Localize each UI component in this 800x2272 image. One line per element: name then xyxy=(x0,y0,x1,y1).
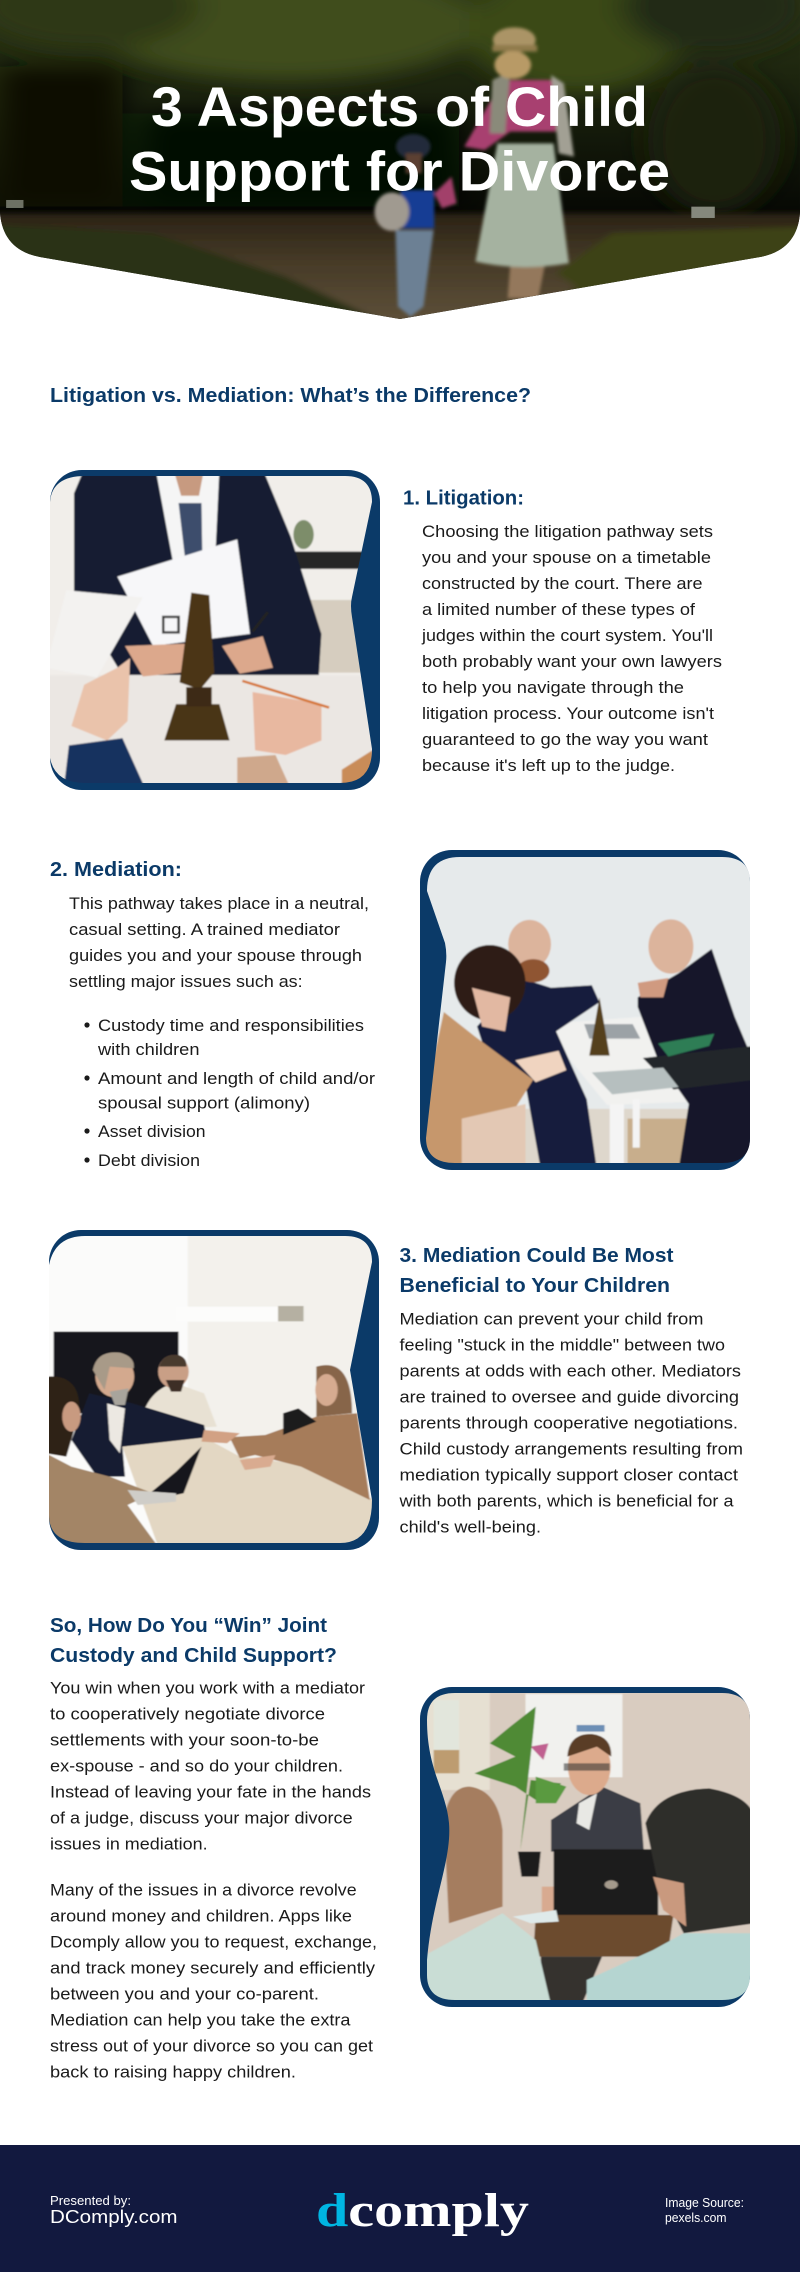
text block: 1. litigation: litigation process. Your outcome isn't xyxy=(422,705,714,723)
text block: 1. litigation: 1. Litigation: xyxy=(403,486,524,510)
text block: how to win joint custody xyxy=(50,1614,377,2082)
footer: presented by xyxy=(50,2194,178,2227)
bullet list: issues settled in mediation xyxy=(84,1017,376,1170)
footer band xyxy=(0,2145,800,2272)
panel: handshake photo card xyxy=(46,1230,379,1550)
text block: 1. litigation: guaranteed to go the way you want xyxy=(422,731,708,749)
text block: how to win joint custody: ex-spouse - and so do your children. xyxy=(50,1758,343,1776)
text block: 1. litigation: a limited number of these types of xyxy=(422,601,695,619)
text block: how to win joint custody: Dcomply allow you to request, exchange, xyxy=(50,1934,377,1952)
text block: how to win joint custody: So, How Do You “Win” Joint xyxy=(50,1614,327,1637)
footer: presented by: Presented by: xyxy=(50,2194,131,2208)
text block: 3. mediation beneficial to children: Child custody arrangements resulting from xyxy=(400,1440,743,1458)
bullet list: issues settled in mediation: Amount and length of child and/or xyxy=(98,1070,376,1088)
text block: 1. litigation: Choosing the litigation pathway sets xyxy=(422,523,713,541)
text block: how to win joint custody: between you and your co-parent. xyxy=(50,1986,319,2004)
text block: 3. mediation beneficial to children: parents at odds with each other. Mediators xyxy=(400,1362,741,1380)
text block: 1. litigation: you and your spouse on a timetable xyxy=(422,549,711,567)
text block: how to win joint custody: to cooperatively negotiate divorce xyxy=(50,1706,325,1724)
text block: 2. mediation: guides you and your spouse through xyxy=(69,947,362,965)
text block: how to win joint custody: of a judge, discuss your major divorce xyxy=(50,1810,353,1828)
text block: 1. litigation: judges within the court system. You'll xyxy=(421,627,713,645)
text block: 3. mediation beneficial to children: feeling "stuck in the middle" between two xyxy=(400,1336,725,1354)
text block: 3. mediation beneficial to children: child's well-being. xyxy=(400,1518,541,1536)
text block: how to win joint custody: Instead of leaving your fate in the hands xyxy=(50,1784,371,1802)
text block: 2. mediation: casual setting. A trained mediator xyxy=(69,921,341,939)
text block: 3. mediation beneficial to children: 3. Mediation Could Be Most xyxy=(400,1244,674,1267)
text block: how to win joint custody: issues in mediation. xyxy=(50,1836,208,1854)
text block: 3. mediation beneficial to children: with both parents, which is beneficial for a xyxy=(398,1492,734,1510)
bullet list: issues settled in mediation: with children xyxy=(97,1041,200,1059)
text block: 1. litigation: both probably want your own lawyers xyxy=(422,653,722,671)
text block: 3. mediation beneficial to children: Mediation can prevent your child from xyxy=(400,1310,704,1328)
section heading: litigation vs mediation: Litigation vs. Mediation: What’s the Difference? xyxy=(50,384,531,407)
text block: 3. mediation beneficial to children: mediation typically support closer contact xyxy=(400,1466,738,1484)
title: 3 Aspects of Child xyxy=(151,75,648,138)
bullet list: issues settled in mediation: Asset division xyxy=(98,1123,206,1141)
title xyxy=(129,75,670,202)
text block: how to win joint custody: back to raising happy children. xyxy=(50,2064,296,2082)
text block: how to win joint custody: settlements with your soon-to-be xyxy=(50,1732,319,1750)
text block: 1. litigation xyxy=(403,486,722,775)
text block: 2. mediation xyxy=(50,858,376,1170)
text block: 2. mediation: This pathway takes place in a neutral, xyxy=(69,895,369,913)
bullet list: issues settled in mediation: Custody time and responsibilities xyxy=(98,1017,364,1035)
text block: how to win joint custody: around money and children. Apps like xyxy=(50,1908,352,1926)
text block: how to win joint custody: Mediation can help you take the extra xyxy=(50,2012,351,2030)
bullet list: issues settled in mediation: spousal support (alimony) xyxy=(98,1094,310,1112)
text block: 2. mediation: settling major issues such as: xyxy=(69,973,303,991)
text block: how to win joint custody: Many of the issues in a divorce revolve xyxy=(50,1882,357,1900)
bullet list: issues settled in mediation: Debt division xyxy=(98,1152,200,1170)
footer: image source: pexels.com xyxy=(665,2211,726,2225)
text block: how to win joint custody: stress out of your divorce so you can get xyxy=(50,2038,373,2056)
text block: 1. litigation: constructed by the court. There are xyxy=(422,575,703,593)
title: Support for Divorce xyxy=(129,140,670,202)
text block: 2. mediation: 2. Mediation: xyxy=(50,858,182,881)
text block: how to win joint custody: and track money securely and efficiently xyxy=(50,1960,376,1978)
logo: dcomply: dcomply xyxy=(316,2184,529,2237)
hero figures xyxy=(374,27,574,317)
text block: 3. mediation beneficial to children xyxy=(398,1244,743,1536)
text block: 1. litigation: to help you navigate through the xyxy=(422,679,684,697)
text block: how to win joint custody: Custody and Child Support? xyxy=(50,1644,337,1667)
panel: office meeting photo card xyxy=(418,1687,755,2007)
footer: image source xyxy=(665,2196,744,2225)
panel: mediation photo card xyxy=(416,850,755,1172)
panel: litigation photo card xyxy=(46,469,383,791)
footer: presented by: DComply.com xyxy=(50,2207,178,2227)
text block: 3. mediation beneficial to children: parents through cooperative negotiations. xyxy=(400,1414,738,1432)
footer: image source: Image Source: xyxy=(665,2196,744,2210)
text block: 1. litigation: because it's left up to the judge. xyxy=(422,757,675,775)
text block: 3. mediation beneficial to children: are trained to oversee and guide divorcing xyxy=(400,1388,739,1406)
text block: how to win joint custody: You win when you work with a mediator xyxy=(50,1680,366,1698)
text block: 3. mediation beneficial to children: Beneficial to Your Children xyxy=(400,1274,670,1297)
hero photo: mother and child walking in a park xyxy=(0,0,800,333)
